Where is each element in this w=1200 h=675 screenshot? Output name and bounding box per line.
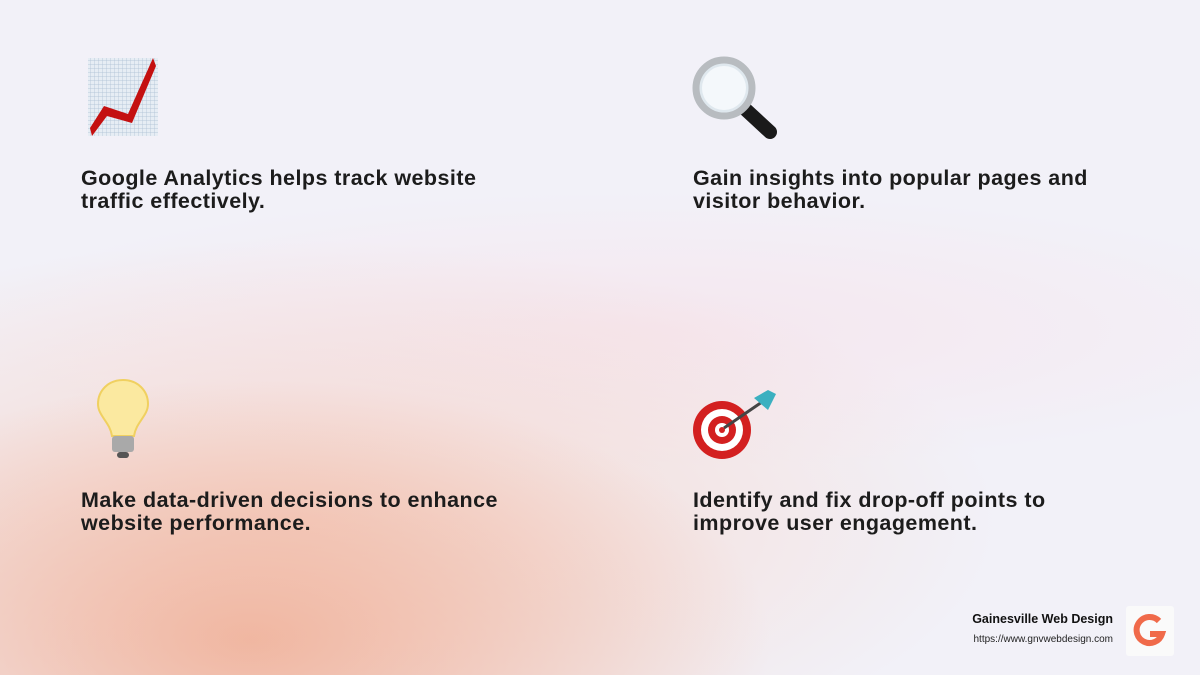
text: decisions: Make data-driven decisions to enhance — [81, 488, 498, 512]
icon: lightbulb — [97, 379, 149, 458]
icon: chart — [88, 58, 158, 136]
text: analytics: traffic effectively. — [81, 189, 265, 213]
text: insights — [693, 166, 1088, 213]
text: drop-off — [693, 488, 1046, 535]
brand: footer — [972, 606, 1174, 656]
icon: magnifier — [692, 56, 777, 139]
text: decisions — [81, 488, 498, 535]
text: analytics: Google Analytics helps track website — [81, 166, 476, 190]
text: insights: Gain insights into popular pages and — [693, 166, 1088, 190]
icon: target — [693, 390, 776, 459]
text: drop-off: improve user engagement. — [693, 511, 977, 535]
text: decisions: website performance. — [81, 511, 311, 535]
brand url: https://www.gnvwebdesign.com — [973, 634, 1113, 645]
text: insights: visitor behavior. — [693, 189, 866, 213]
logo — [1126, 606, 1174, 656]
text: analytics — [81, 166, 476, 213]
brand name: Gainesville Web Design — [972, 612, 1113, 626]
text: drop-off: Identify and fix drop-off points to — [693, 488, 1046, 512]
